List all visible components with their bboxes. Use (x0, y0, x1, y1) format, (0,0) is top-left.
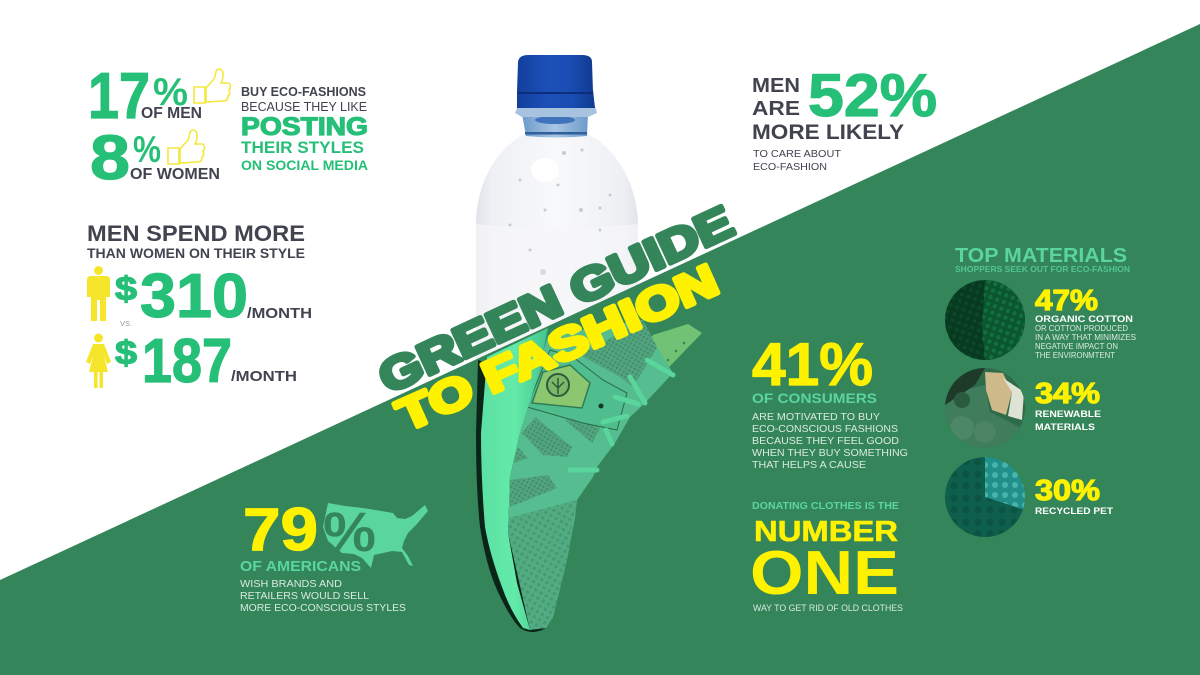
panel: 41% of consumers: ARE MOTIVATED TO BUY (752, 411, 880, 423)
panel: men more likely: ECO-FASHION (753, 162, 827, 173)
stat: 47% organic cotton: OR COTTON PRODUCED (1035, 324, 1128, 333)
stat: 17% of men: OF MEN (141, 105, 202, 122)
stat: 17% of men: 17 (88, 59, 150, 132)
title: green guide to fashion: TO FASHION (389, 254, 725, 441)
text: of americans: OF AMERICANS (240, 558, 361, 575)
shoe logo panel (527, 350, 627, 430)
text: posting their styles (241, 85, 368, 173)
image: renewable materials (945, 368, 1025, 448)
stat: 34% renewable materials: MATERIALS (1035, 422, 1095, 433)
panel: men more likely: 52% (808, 62, 937, 129)
text: of americans: WISH BRANDS AND (240, 578, 342, 590)
image: recycled pet (945, 457, 1025, 537)
text: posting their styles: BECAUSE THEY LIKE (241, 100, 367, 114)
panel: 41% of consumers (752, 331, 908, 471)
stat: 47% organic cotton: THE ENVIRONMTENT (1035, 351, 1115, 360)
shoe toe mesh (508, 500, 577, 630)
stat: 47% organic cotton: ORGANIC COTTON (1035, 314, 1133, 325)
panel: men more likely: MEN (752, 75, 800, 97)
shoe mesh panels (510, 320, 657, 507)
icon: usa map (323, 503, 428, 568)
stat: percent sign: % (323, 500, 376, 563)
stat: 30% recycled pet: RECYCLED PET (1035, 506, 1113, 517)
panel: 79% of americans (240, 496, 428, 614)
shoe sole (476, 360, 546, 632)
heading: top materials: SHOPPERS SEEK OUT FOR ECO-FASHION (955, 264, 1130, 274)
text: posting their styles: BUY ECO-FASHIONS (241, 85, 366, 99)
panel: 41% of consumers: 41% (752, 331, 873, 398)
stat: 8% of women: 8 (90, 123, 130, 193)
stat: $310 per month: $ (115, 270, 137, 307)
text: posting their styles: THEIR STYLES (241, 138, 364, 157)
stat: 34% renewable materials: RENEWABLE (1035, 409, 1101, 420)
stat: 34% renewable materials: 34% (1035, 378, 1100, 410)
icon: thumbs up (168, 130, 204, 164)
stat: 47% organic cotton: 47% (1035, 285, 1098, 317)
stat: 17% of men: % (153, 71, 188, 114)
stat: $187 per month (115, 327, 297, 396)
stat: $310 per month (115, 262, 312, 331)
heading: top materials (955, 245, 1130, 274)
text: posting their styles: POSTING (241, 113, 368, 141)
icon: thumbs up (194, 69, 230, 103)
shoe laces (570, 360, 673, 470)
panel: 41% of consumers: BECAUSE THEY FEEL GOOD (752, 435, 899, 447)
panel: men more likely: ARE (752, 98, 800, 120)
panel: donating clothes: ONE (750, 539, 899, 608)
text: of americans: RETAILERS WOULD SELL (240, 590, 369, 602)
stat: $310 per month: 310 (140, 262, 248, 331)
panel: top materials (945, 245, 1136, 537)
stat: 79: 79 (243, 496, 318, 563)
stat: 8% of women: OF WOMEN (130, 166, 220, 183)
heading: men spend more (87, 221, 305, 261)
stat: $310 per month: /MONTH (247, 305, 312, 322)
heading: men spend more: THAN WOMEN ON THEIR STYLE (87, 246, 305, 261)
text: posting their styles: ON SOCIAL MEDIA (241, 157, 368, 173)
panel: donating clothes (750, 500, 903, 613)
text: of americans: MORE ECO-CONSCIOUS STYLES (240, 602, 406, 614)
icon: woman (86, 334, 111, 388)
label: vs: VS. (120, 319, 132, 328)
panel: men spend more (86, 221, 312, 396)
title: green guide to fashion (371, 196, 741, 441)
stat: 30% recycled pet: 30% (1035, 475, 1100, 507)
stat: 30% recycled pet (1035, 475, 1113, 517)
icon: man (87, 266, 110, 321)
icon: sneaker (476, 320, 702, 632)
panel: men more likely: MORE LIKELY (752, 121, 904, 144)
image: organic cotton (945, 280, 1025, 360)
panel: 41% of consumers: THAT HELPS A CAUSE (752, 459, 866, 471)
stat: $187 per month: 187 (142, 327, 232, 396)
stat: 34% renewable materials (1035, 378, 1101, 433)
stat: 47% organic cotton (1035, 285, 1136, 360)
stat: 47% organic cotton: NEGATIVE IMPACT ON (1035, 342, 1118, 351)
title: green guide to fashion: GREEN GUIDE (371, 196, 741, 403)
heading: top materials: TOP MATERIALS (955, 245, 1127, 267)
stat: 8% of women: % (133, 129, 161, 170)
panel: 41% of consumers: WHEN THEY BUY SOMETHING (752, 447, 908, 459)
stat: 47% organic cotton: IN A WAY THAT MINIMIZES (1035, 333, 1136, 342)
icon: plastic bottle (476, 55, 638, 400)
panel: donating clothes: NUMBER (754, 516, 898, 548)
heading: men spend more: MEN SPEND MORE (87, 221, 305, 246)
panel: men more likely (752, 62, 937, 173)
panel: 41% of consumers: ECO-CONSCIOUS FASHIONS (752, 423, 898, 435)
panel: posting on social media (88, 59, 368, 193)
panel: men more likely: TO CARE ABOUT (753, 149, 841, 160)
text: of americans (240, 558, 406, 614)
shoe upper (508, 320, 673, 630)
panel: 41% of consumers: OF CONSUMERS (752, 390, 877, 406)
stat: $187 per month: $ (115, 334, 137, 371)
panel: donating clothes: DONATING CLOTHES IS THE (752, 500, 899, 512)
stat: 8% of women (90, 123, 220, 193)
stat: 17% of men (88, 59, 202, 132)
shoe logo (547, 374, 569, 396)
stat: $187 per month: /MONTH (231, 368, 297, 385)
shoe tongue (600, 324, 702, 432)
panel: donating clothes: WAY TO GET RID OF OLD CLOTHES (753, 603, 903, 613)
